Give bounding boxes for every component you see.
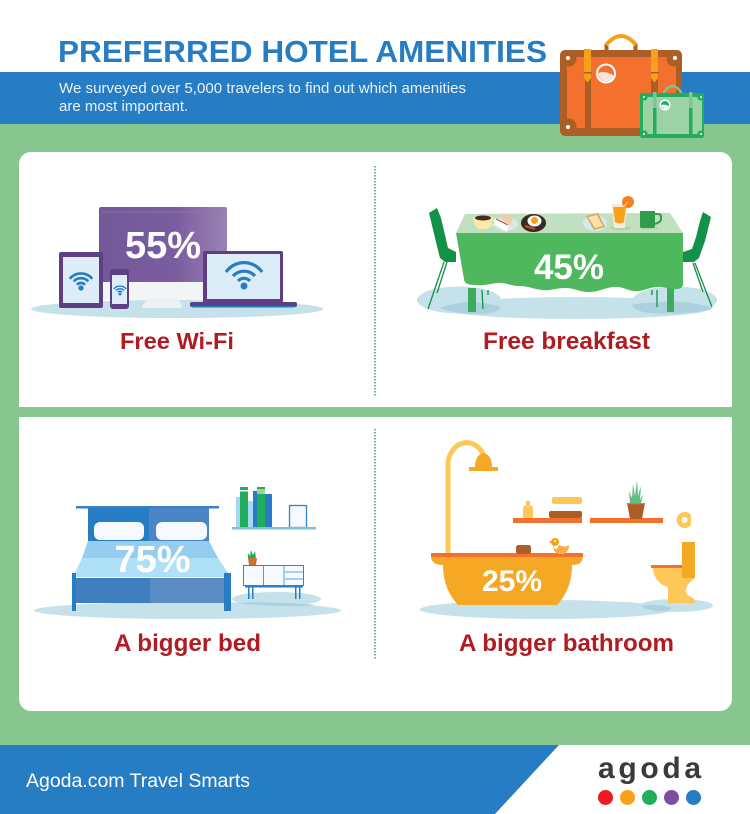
icon: bathtub	[431, 545, 583, 605]
floor shadows	[420, 599, 713, 619]
icon: tablet	[59, 252, 103, 308]
icon: toast plate	[583, 213, 607, 231]
floor shadows	[417, 286, 717, 319]
label: A bigger bathroom	[459, 630, 674, 657]
floor shadow	[31, 300, 323, 318]
icon: rubber duck	[549, 538, 569, 554]
panel: bigger bed	[34, 487, 341, 657]
icon: sideboard with plant	[244, 550, 304, 599]
icon: right shelf with plant	[590, 480, 663, 523]
footer band	[0, 745, 559, 814]
footer text: Agoda.com Travel Smarts	[26, 771, 250, 792]
stat: 75%: 75%	[114, 539, 191, 581]
icon: bed	[72, 506, 231, 611]
subtitle second line: are most important.	[59, 98, 188, 115]
label: Free Wi-Fi	[120, 328, 234, 354]
icon: orange juice	[611, 196, 634, 230]
stat: 55%: 55%	[125, 225, 201, 267]
logo: agoda: agoda	[598, 752, 701, 785]
green background	[0, 124, 750, 745]
icon: desktop monitor	[99, 207, 227, 308]
panel: free wi-fi	[31, 207, 323, 354]
icon: shower	[448, 443, 498, 554]
large orange suitcase	[560, 36, 682, 136]
label: Free breakfast	[483, 328, 650, 355]
icon: coffee cup	[473, 216, 496, 229]
icon: sandwich	[494, 213, 518, 232]
icon: bookshelf	[232, 487, 316, 530]
icon: toilet paper	[677, 512, 691, 528]
small green suitcase	[640, 86, 704, 138]
header band	[0, 72, 750, 124]
stat: 25%: 25%	[482, 565, 542, 598]
panel: bigger bathroom	[420, 443, 713, 657]
table legs	[468, 288, 674, 312]
panel: bottom white card	[19, 417, 732, 711]
icon: phone	[110, 269, 129, 309]
floor shadows	[34, 592, 341, 619]
icon: toilet	[651, 542, 695, 603]
icon: green mug	[639, 211, 661, 230]
icon: left shelf	[513, 497, 582, 523]
logo: agoda	[598, 752, 701, 805]
label: A bigger bed	[114, 630, 261, 657]
icon: left chair	[428, 208, 488, 309]
icon: right chair	[652, 212, 712, 307]
tablecloth	[456, 213, 683, 292]
stat: 45%: 45%	[534, 248, 604, 287]
title: PREFERRED HOTEL AMENITIES	[58, 34, 547, 69]
panel: top white card	[19, 152, 732, 407]
icon: eggs plate	[521, 214, 546, 232]
panel: free breakfast	[417, 196, 717, 355]
icon: laptop	[190, 251, 297, 308]
icon: luggage	[560, 36, 704, 138]
subtitle: We surveyed over 5,000 travelers to find out which amenities	[59, 80, 466, 97]
